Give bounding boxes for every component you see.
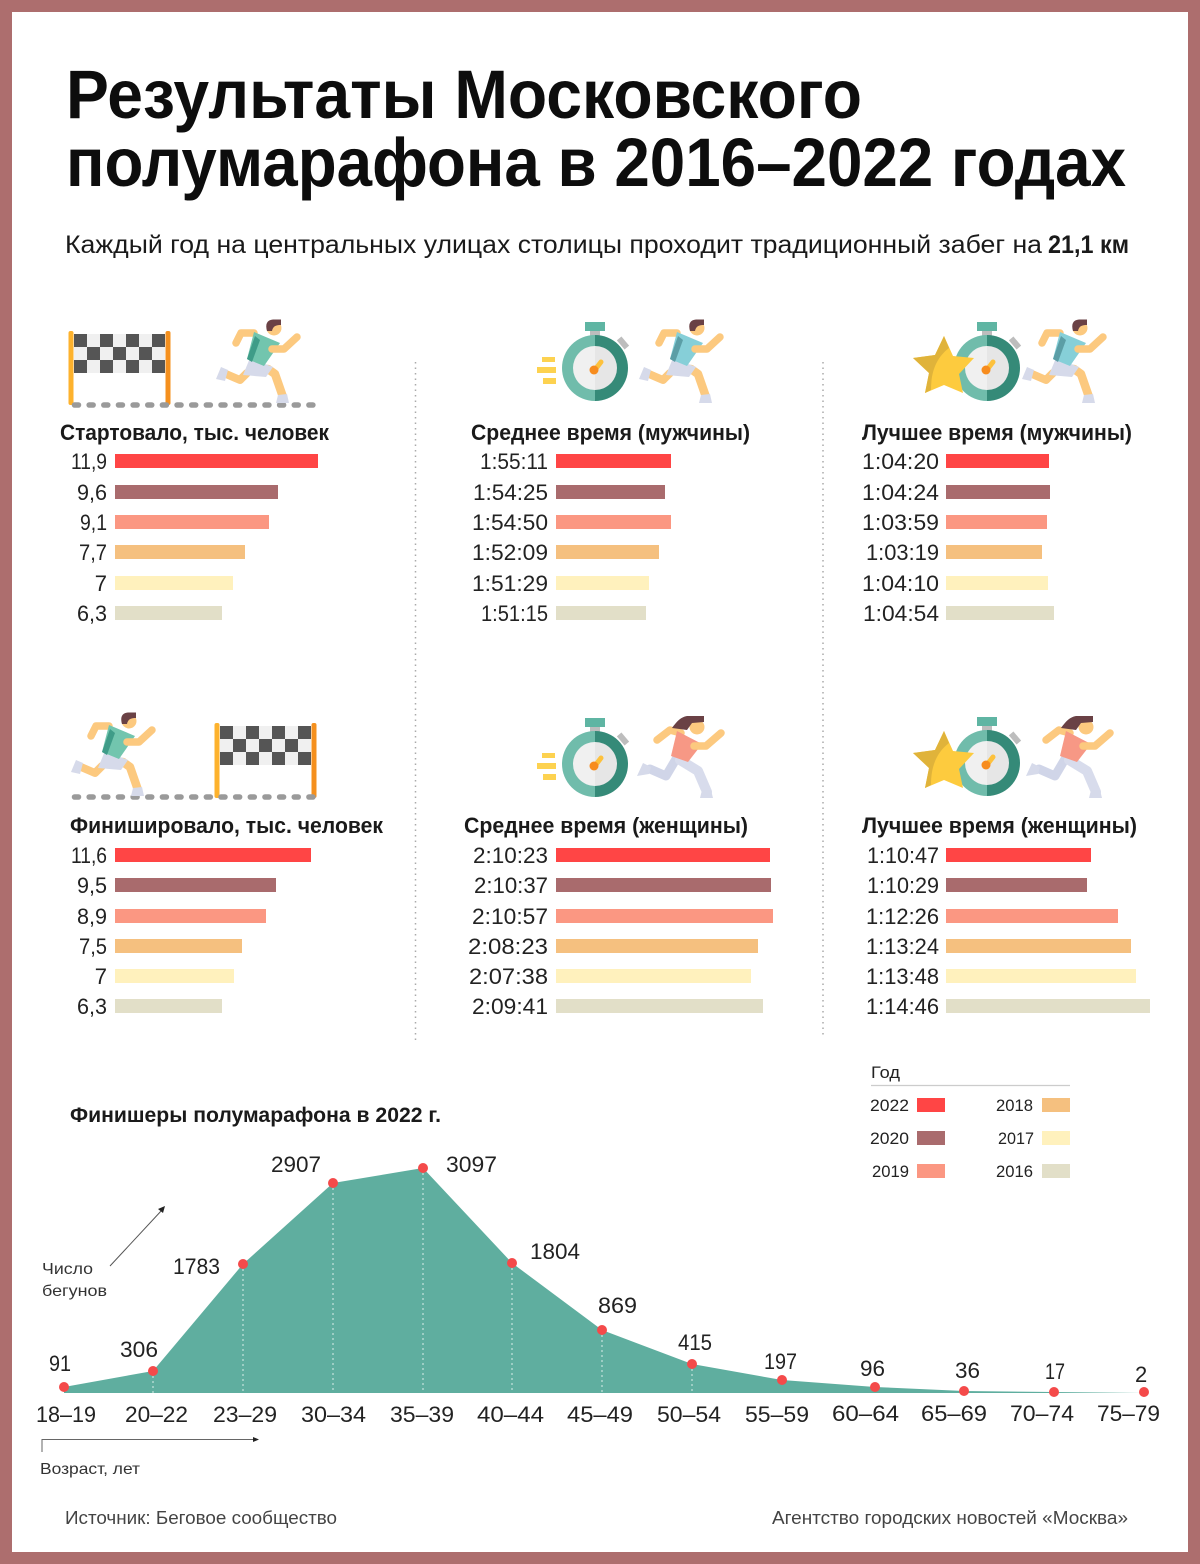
bar chart: 9,1 bbox=[80, 510, 107, 535]
bar chart: 11,9 bbox=[71, 449, 107, 474]
title: Результаты Московского bbox=[66, 56, 862, 133]
bar chart: 1:04:54 bbox=[863, 601, 939, 626]
age labels: 60–64 bbox=[832, 1401, 899, 1426]
value labels: 1783 bbox=[173, 1254, 220, 1279]
bar chart: 1:54:50 bbox=[472, 510, 548, 535]
age labels: 55–59 bbox=[745, 1402, 809, 1427]
legend bbox=[870, 1063, 1070, 1181]
age labels: 45–49 bbox=[567, 1402, 633, 1427]
panel: started bbox=[60, 320, 330, 626]
chart heading: Финишеры полумарафона в 2022 г. bbox=[70, 1104, 441, 1127]
age labels bbox=[36, 1401, 1160, 1427]
bar chart: 2:07:38 bbox=[469, 964, 548, 989]
bar chart: 1:12:26 bbox=[866, 904, 939, 929]
age labels: 75–79 bbox=[1097, 1401, 1160, 1426]
panel: best women bbox=[862, 716, 1150, 1019]
age labels: 20–22 bbox=[125, 1402, 188, 1427]
icon: stopwatch and male runner bbox=[537, 320, 720, 403]
value labels: 3097 bbox=[446, 1152, 497, 1177]
axis label: age: Возраст, лет bbox=[40, 1461, 141, 1478]
bar chart: 2:08:23 bbox=[468, 934, 548, 959]
bar chart: 2:10:37 bbox=[474, 873, 548, 898]
bar chart: 1:04:24 bbox=[862, 480, 939, 505]
value labels: 197 bbox=[764, 1349, 797, 1374]
bar chart: 7 bbox=[95, 964, 107, 989]
bar chart: 1:04:10 bbox=[862, 571, 939, 596]
bar chart: 1:14:46 bbox=[866, 994, 939, 1019]
age labels: 35–39 bbox=[390, 1402, 454, 1427]
value labels: 17 bbox=[1045, 1359, 1065, 1384]
bar chart: 1:03:59 bbox=[862, 510, 939, 535]
legend: Год bbox=[871, 1063, 900, 1082]
bar chart: 9,5 bbox=[77, 873, 107, 898]
bar chart: 8,9 bbox=[77, 904, 107, 929]
heading: Лучшее время (женщины) bbox=[862, 813, 1137, 838]
bar chart: 6,3 bbox=[77, 601, 107, 626]
bar chart: 11,6 bbox=[71, 843, 107, 868]
bar chart bbox=[71, 449, 318, 626]
icon: star, stopwatch and male runner bbox=[913, 320, 1103, 403]
legend: 2016 bbox=[996, 1162, 1033, 1181]
bar chart bbox=[71, 843, 311, 1019]
title: полумарафона в 2016–2022 годах bbox=[66, 124, 1126, 201]
bar chart: 2:10:23 bbox=[473, 843, 548, 868]
value labels: 306 bbox=[120, 1337, 158, 1362]
value labels: 2907 bbox=[271, 1152, 321, 1177]
bar chart: 7 bbox=[95, 571, 107, 596]
bar chart: 1:13:24 bbox=[866, 934, 939, 959]
bar chart bbox=[862, 449, 1054, 626]
value labels bbox=[49, 1152, 1147, 1387]
age labels: 23–29 bbox=[213, 1402, 277, 1427]
heading: Лучшее время (мужчины) bbox=[862, 420, 1132, 445]
value labels: 2 bbox=[1135, 1362, 1147, 1387]
bar chart: 2:10:57 bbox=[472, 904, 548, 929]
bar chart: 7,7 bbox=[79, 540, 107, 565]
panel: finished bbox=[70, 712, 384, 1019]
bar chart: 1:10:47 bbox=[867, 843, 939, 868]
legend: 2017 bbox=[998, 1129, 1034, 1148]
icon: stopwatch and female runner bbox=[537, 716, 721, 798]
bar chart: 1:03:19 bbox=[866, 540, 939, 565]
title bbox=[66, 56, 1126, 201]
bar chart: 6,3 bbox=[77, 994, 107, 1019]
bar chart: 1:04:20 bbox=[862, 449, 939, 474]
value labels: 91 bbox=[49, 1351, 71, 1376]
subtitle: 21,1 км bbox=[1048, 231, 1129, 259]
value labels: 36 bbox=[955, 1358, 980, 1383]
heading: Стартовало, тыс. человек bbox=[60, 420, 330, 445]
value labels: 415 bbox=[678, 1330, 712, 1355]
axis label: number of runners: бегунов bbox=[42, 1283, 107, 1300]
age labels: 50–54 bbox=[657, 1402, 721, 1427]
bar chart bbox=[468, 843, 773, 1019]
age labels: 40–44 bbox=[477, 1402, 544, 1427]
bar chart: 1:55:11 bbox=[480, 449, 548, 474]
bar chart: 7,5 bbox=[79, 934, 107, 959]
legend: 2020 bbox=[870, 1129, 909, 1148]
agency credit: Агентство городских новостей «Москва» bbox=[772, 1508, 1128, 1528]
value labels: 1804 bbox=[530, 1239, 580, 1264]
bar chart: 2:09:41 bbox=[472, 994, 548, 1019]
icon: start flag and runner bbox=[68, 320, 313, 405]
panel: best men bbox=[862, 320, 1132, 626]
bar chart: 1:10:29 bbox=[867, 873, 939, 898]
bar chart: 1:52:09 bbox=[472, 540, 548, 565]
icon: runner and finish flag bbox=[71, 712, 316, 798]
value labels: 96 bbox=[860, 1356, 885, 1381]
legend: 2018 bbox=[996, 1096, 1033, 1115]
axis label: number of runners: Число bbox=[42, 1261, 93, 1278]
legend: 2022 bbox=[870, 1096, 909, 1115]
panel: average women bbox=[464, 716, 773, 1019]
arrow: number of runners bbox=[110, 1206, 165, 1266]
source: Источник: Беговое сообщество bbox=[65, 1508, 337, 1528]
bar chart: 1:54:25 bbox=[473, 480, 548, 505]
age labels: 30–34 bbox=[301, 1402, 366, 1427]
axis label: number of runners bbox=[42, 1261, 107, 1300]
legend: 2019 bbox=[872, 1162, 909, 1181]
heading: Среднее время (женщины) bbox=[464, 813, 748, 838]
bar chart: 1:51:15 bbox=[481, 601, 548, 626]
bar chart: 1:51:29 bbox=[472, 571, 548, 596]
bar chart bbox=[866, 843, 1150, 1019]
arrow: age bbox=[42, 1437, 259, 1452]
age labels: 70–74 bbox=[1010, 1401, 1074, 1426]
age labels: 65–69 bbox=[921, 1401, 987, 1426]
bar chart bbox=[472, 449, 671, 626]
heading: Финишировало, тыс. человек bbox=[70, 813, 384, 838]
heading: Среднее время (мужчины) bbox=[471, 420, 750, 445]
age labels: 18–19 bbox=[36, 1402, 96, 1427]
area chart: finishers by age bbox=[36, 1152, 1160, 1427]
bar chart: 9,6 bbox=[77, 480, 107, 505]
icon: star, stopwatch and female runner bbox=[913, 716, 1110, 798]
panel: average men bbox=[471, 320, 750, 626]
value labels: 869 bbox=[598, 1293, 637, 1318]
subtitle: Каждый год на центральных улицах столицы проходит традиционный забег на bbox=[65, 231, 1042, 259]
bar chart: 1:13:48 bbox=[866, 964, 939, 989]
